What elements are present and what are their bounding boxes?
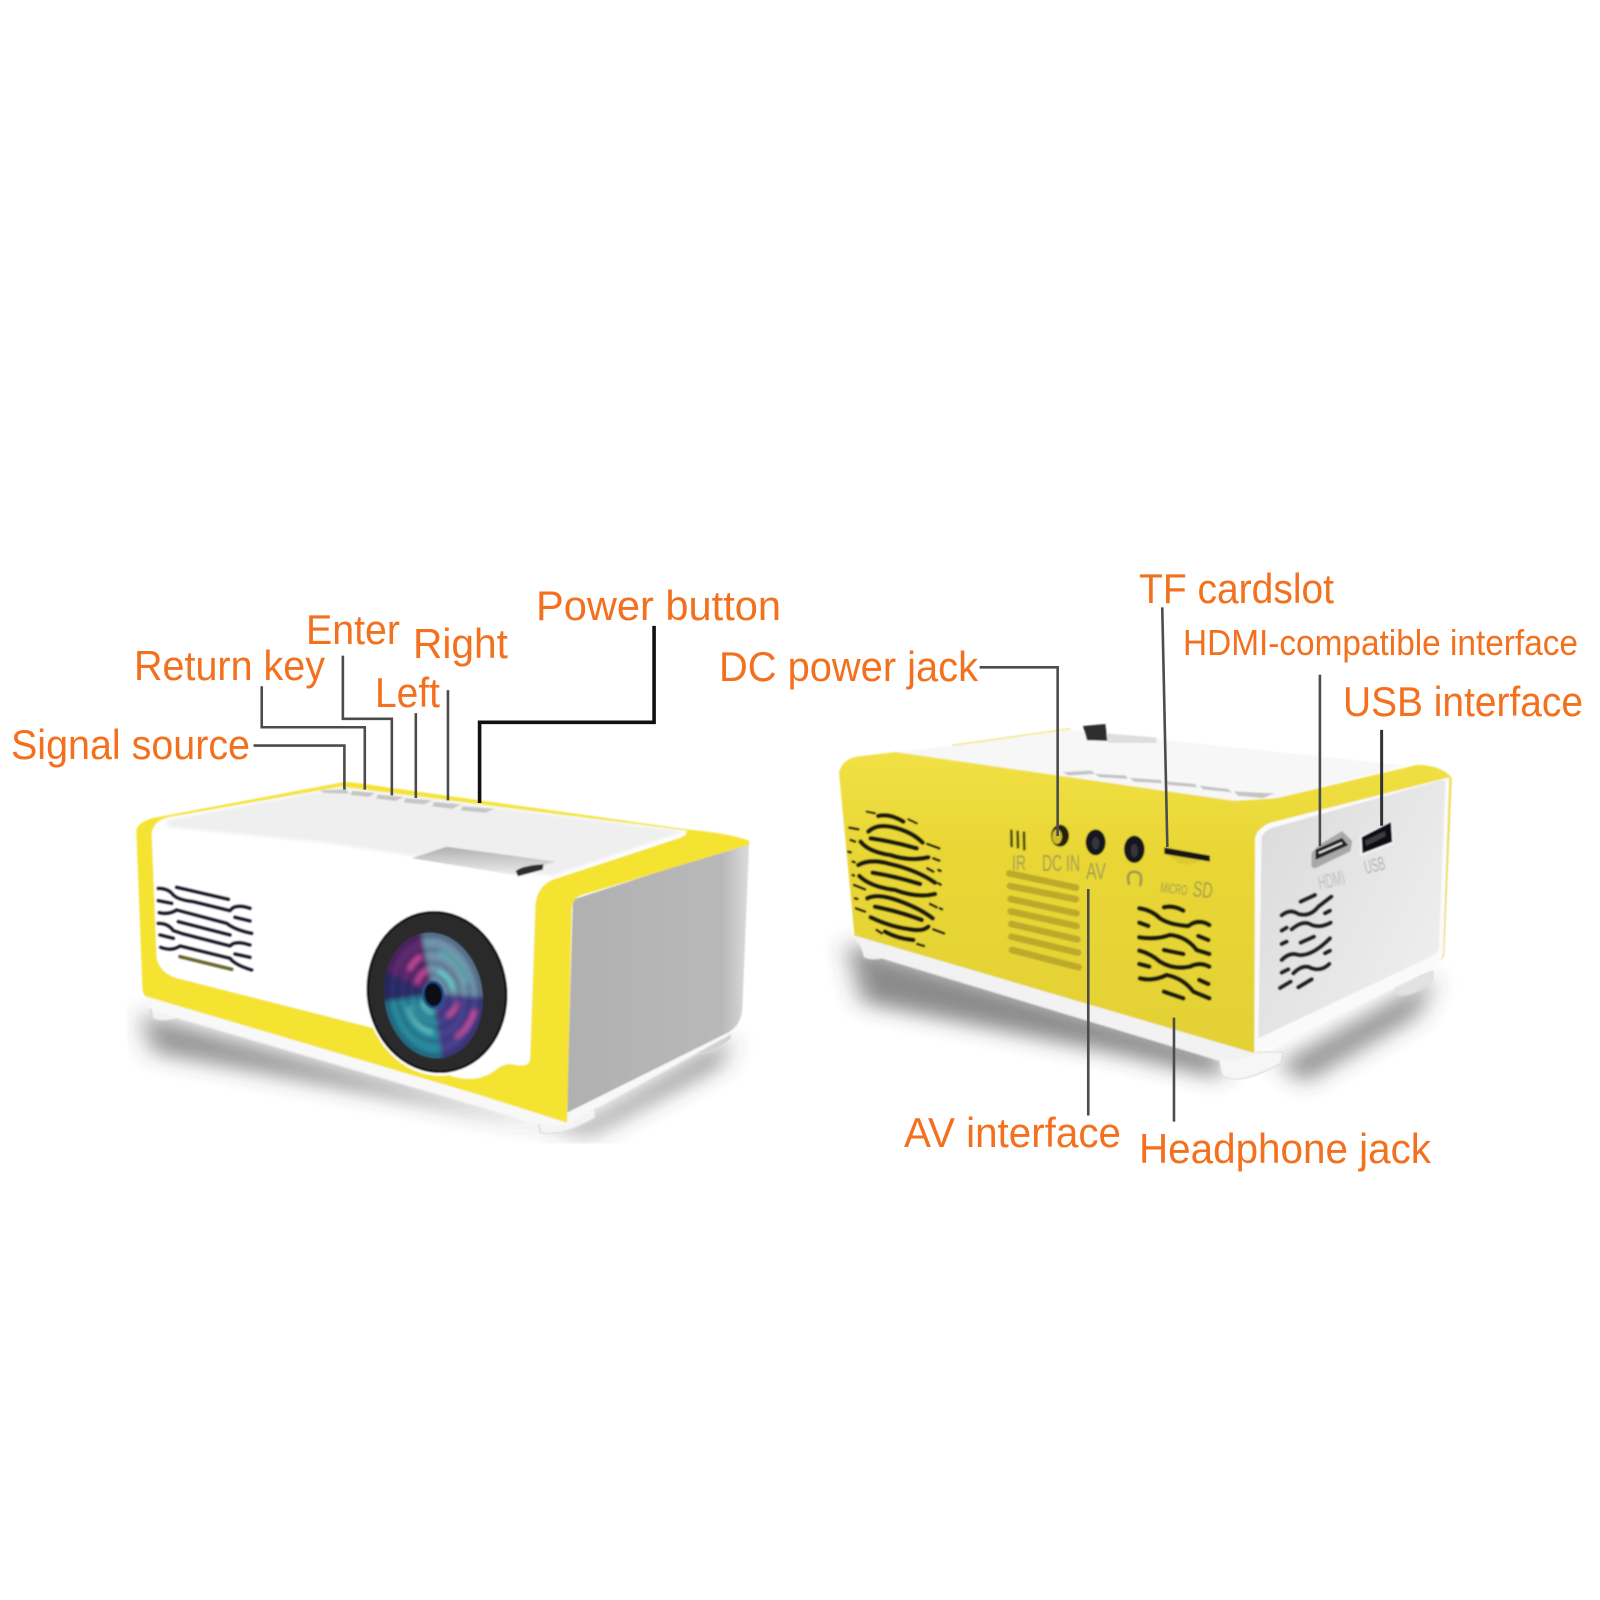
white base strip xyxy=(854,932,1254,1060)
label: Left: Left xyxy=(375,669,440,716)
yellow shell xyxy=(136,782,749,1123)
port markings xyxy=(1012,850,1388,903)
label: AV interface: AV interface xyxy=(904,1109,1121,1156)
port markings: HDMI xyxy=(1316,867,1347,895)
yellow shell xyxy=(839,752,1452,1053)
lower vent xyxy=(1139,907,1209,998)
USB port xyxy=(1360,820,1394,856)
lens xyxy=(366,910,508,1077)
side vent xyxy=(1280,895,1331,988)
feet xyxy=(859,942,1433,1079)
jacks xyxy=(1051,825,1145,886)
leader lines: left projector xyxy=(254,626,654,803)
label: Signal source: Signal source xyxy=(11,721,250,768)
HDMI port xyxy=(1311,831,1352,868)
front white face xyxy=(152,787,686,1079)
label: TF cardslot: TF cardslot xyxy=(1139,565,1334,612)
button row xyxy=(1063,771,1275,798)
speaker vent xyxy=(158,887,252,970)
white base strip xyxy=(142,989,742,1125)
feet xyxy=(149,1002,731,1133)
white side panel xyxy=(1254,777,1449,1053)
port markings: AV xyxy=(1086,858,1106,884)
button row xyxy=(320,790,495,813)
leader lines: right projector xyxy=(980,607,1382,1122)
top plate xyxy=(165,788,685,876)
port markings: MICRO xyxy=(1160,879,1188,898)
label: Power button: Power button xyxy=(536,582,781,629)
IR bars xyxy=(1011,831,1024,849)
label: Right: Right xyxy=(413,620,508,667)
right projector: rear view xyxy=(839,724,1452,1084)
grille xyxy=(1009,873,1079,967)
label: Enter: Enter xyxy=(306,606,400,653)
label: Return key: Return key xyxy=(134,642,325,689)
port markings: USB xyxy=(1362,853,1388,879)
port markings: DC IN xyxy=(1042,850,1080,876)
label: Headphone jack: Headphone jack xyxy=(1139,1125,1432,1172)
label: HDMI-compatible interface: HDMI-compatible interface xyxy=(1183,622,1578,663)
top plate xyxy=(895,730,1405,802)
focus tab xyxy=(1083,724,1156,743)
SD slot xyxy=(1164,847,1210,864)
back rim xyxy=(952,729,1071,745)
floor shadow xyxy=(140,1012,732,1135)
port markings: SD xyxy=(1191,876,1214,903)
side panel xyxy=(567,842,749,1113)
circular speaker vent xyxy=(848,812,944,946)
focus slot xyxy=(412,847,556,876)
label: USB interface: USB interface xyxy=(1343,678,1583,725)
left projector: front view xyxy=(136,782,749,1135)
grey inset xyxy=(1258,780,1445,1038)
label: DC power jack: DC power jack xyxy=(719,643,979,690)
floor shadow xyxy=(846,942,1436,1084)
port markings: IR xyxy=(1012,852,1026,875)
